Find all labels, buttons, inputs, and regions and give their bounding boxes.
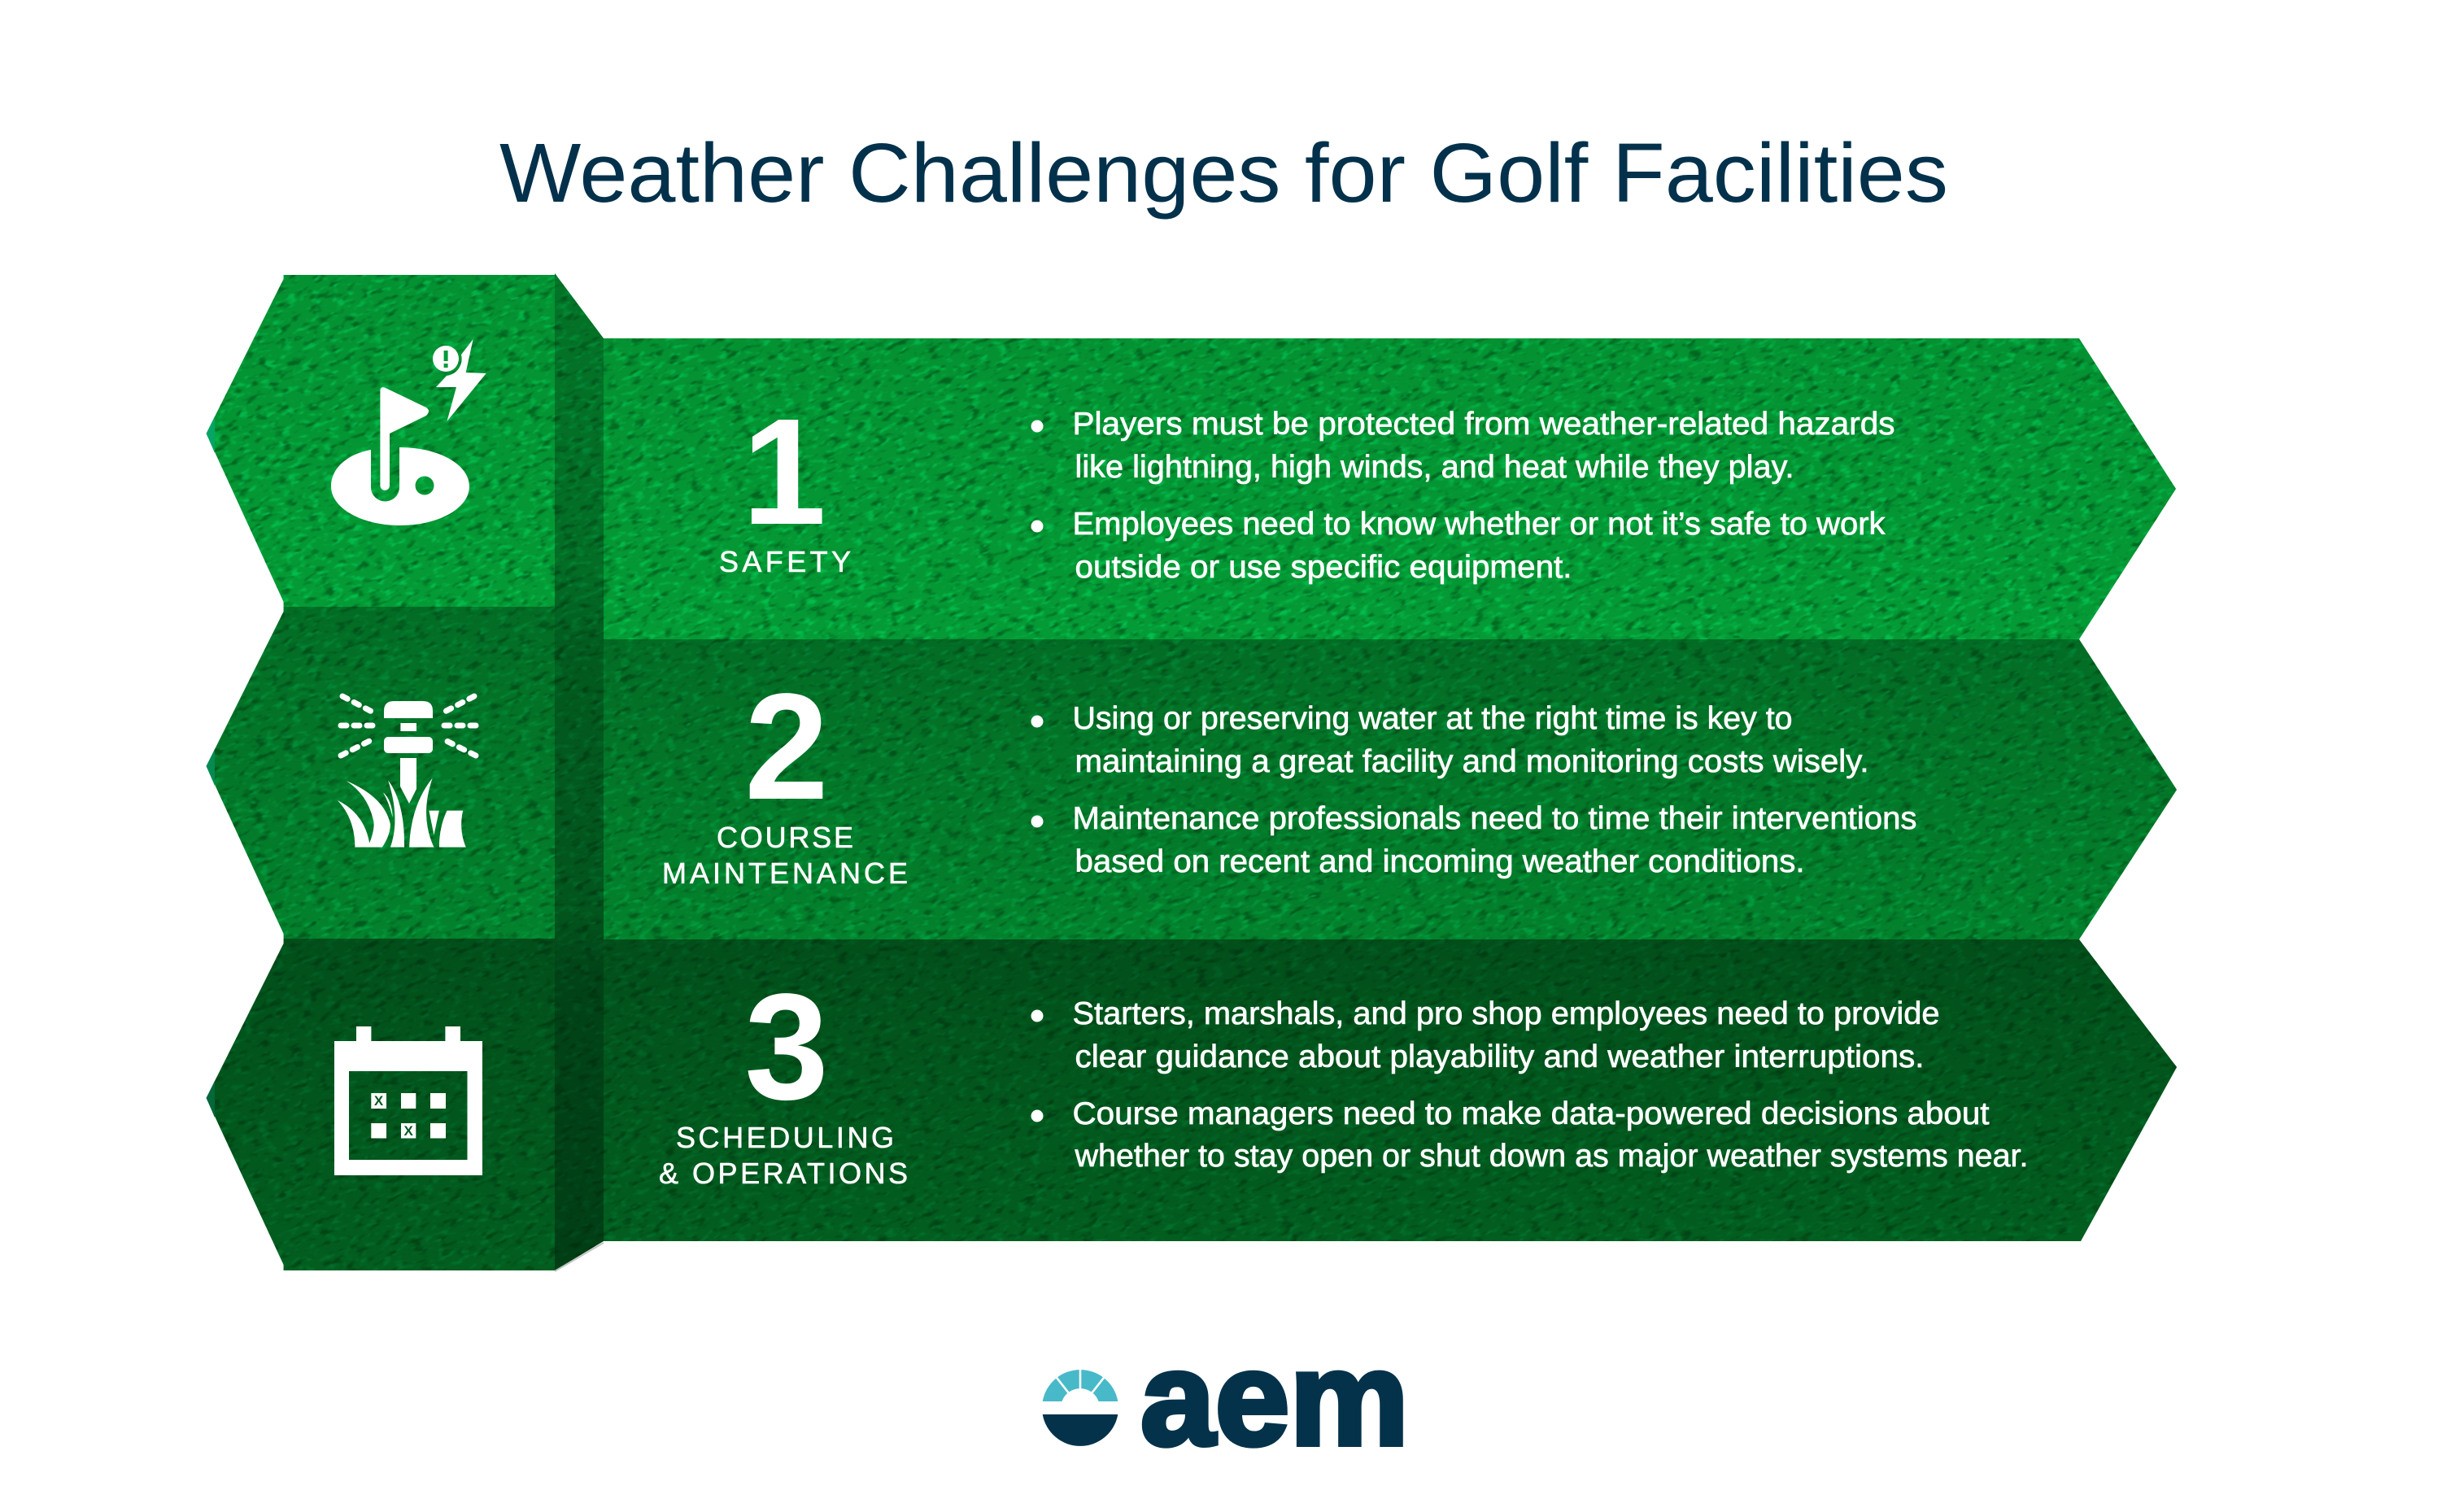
bullet list: scheduling and operations: Course managers need to make data-powered decisions about <box>1072 1096 1990 1131</box>
number 3: 3 <box>744 963 829 1131</box>
heading: course maintenance: COURSE <box>717 821 853 854</box>
panel: row 1 safety <box>331 339 1895 585</box>
bullet list: course maintenance <box>1031 701 1916 879</box>
bullet list: course maintenance: based on recent and incoming weather conditions. <box>1075 844 1804 879</box>
bullet list: scheduling and operations: whether to stay open or shut down as major weather systems near. <box>1074 1139 2029 1174</box>
bullet list: scheduling and operations: clear guidance about playability and weather interruptions. <box>1075 1039 1925 1074</box>
heading: scheduling and operations: SCHEDULING <box>676 1121 894 1154</box>
bullet list: safety: Players must be protected from weather-related hazards <box>1072 407 1895 442</box>
icon: golf flag with lightning alert <box>331 339 486 525</box>
bullet list: safety: like lightning, high winds, and heat while they play. <box>1075 450 1794 485</box>
icon: calendar: X <box>374 1093 384 1109</box>
bullet list: safety: outside or use specific equipment. <box>1075 550 1572 585</box>
heading: scheduling and operations: & OPERATIONS <box>659 1157 908 1190</box>
bullet list: scheduling and operations <box>1031 996 2029 1174</box>
heading: course maintenance <box>662 821 908 890</box>
panel: row 3 scheduling and operations <box>334 963 2029 1190</box>
bullet list: course maintenance: Maintenance professionals need to time their interventions <box>1072 801 1916 836</box>
icon: calendar: X <box>404 1123 414 1139</box>
bullet list: safety <box>1031 407 1895 585</box>
title: Weather Challenges for Golf Facilities <box>499 126 1948 220</box>
icon: aem gauge mark <box>1043 1366 1118 1446</box>
panel: row 2 course maintenance <box>338 663 1916 890</box>
icon: sprinkler and grass <box>338 696 476 848</box>
number 2: 2 <box>744 663 829 831</box>
bullet list: safety: Employees need to know whether or not it’s safe to work <box>1072 507 1886 542</box>
heading: scheduling and operations <box>659 1121 908 1190</box>
bullet list: course maintenance: maintaining a great facility and monitoring costs wisely. <box>1075 744 1869 779</box>
number 1: 1 <box>742 388 826 556</box>
bullet list: course maintenance: Using or preserving water at the right time is key to <box>1072 701 1793 736</box>
panel: green turf ribbon background <box>207 273 2177 1271</box>
heading: course maintenance: MAINTENANCE <box>662 856 908 890</box>
icon: calendar <box>334 1026 482 1175</box>
wordmark: aem <box>1140 1324 1409 1473</box>
logo: aem <box>1043 1324 1409 1473</box>
heading: safety: SAFETY <box>719 545 851 578</box>
bullet list: scheduling and operations: Starters, marshals, and pro shop employees need to provide <box>1072 996 1939 1031</box>
